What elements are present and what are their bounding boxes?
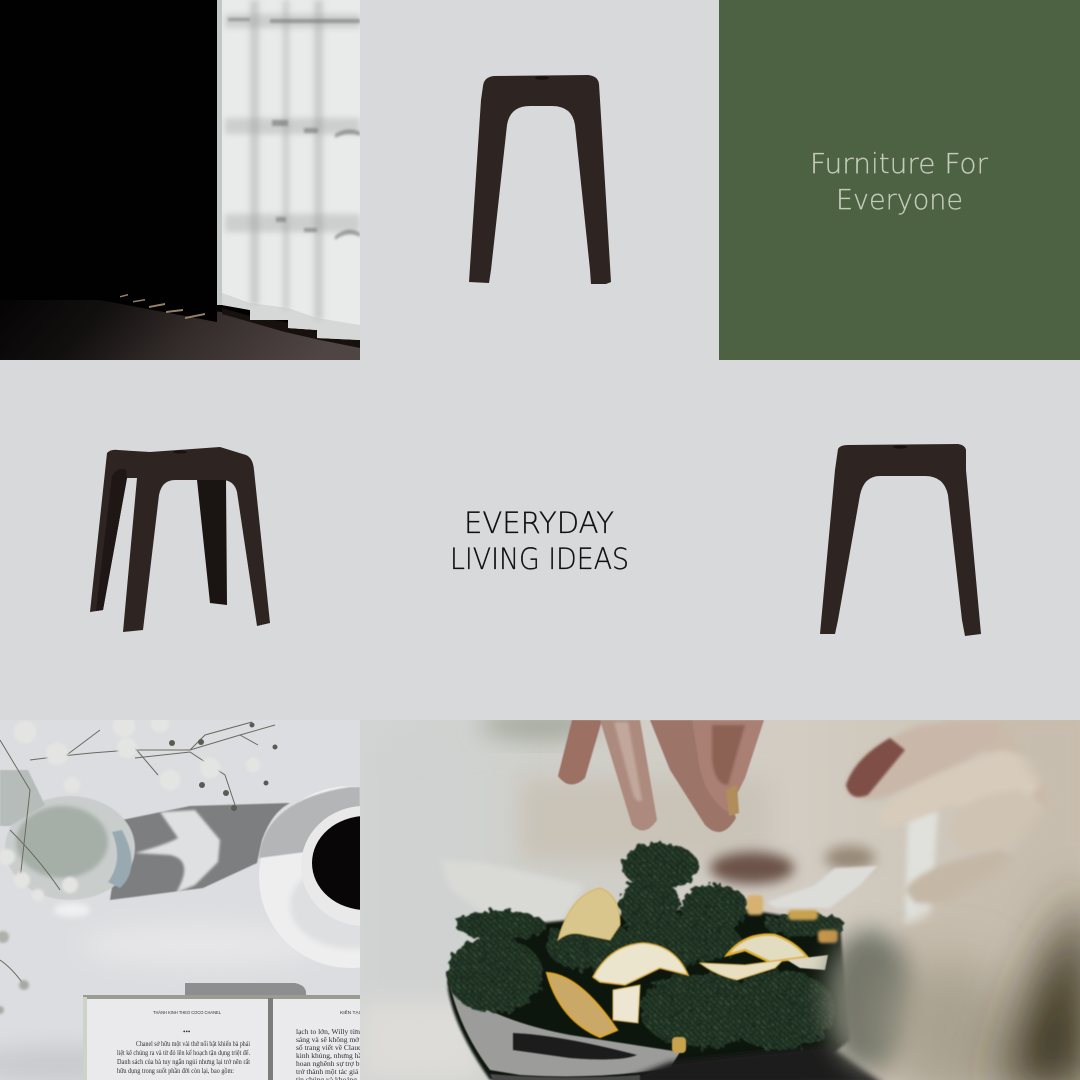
lemon slices [547,888,838,1053]
heading: Furniture For Everyone: Everyone [836,183,963,216]
product: stool angled view, left [90,447,270,632]
back right leg [197,480,227,605]
blurred foreground foliage [825,930,915,1070]
dark foreground blur [1000,890,1080,1080]
coffee [312,816,360,910]
book text: ••• [183,1028,191,1036]
photo: dark curtain and sheer window [0,0,360,360]
book text: số trang viết về Claudine trong [296,1043,389,1052]
window edge line [217,0,222,305]
sheer curtain [222,0,360,340]
left hand fingers [558,720,764,832]
book text: KIẾN TẠO [340,1009,363,1016]
curtain hem [222,293,360,340]
book text: Chanel sở hữu một vài thứ nổi bật khiến bà phải [136,1039,250,1048]
panel: green title block [719,0,1080,360]
book text: THÀNH KINH THEO COCO CHANEL [153,1009,221,1016]
book text: sáng và sẽ không mở của [296,1035,372,1044]
book text: lạch to lớn, Willy từng nhớ [296,1027,378,1036]
book text: hữu dụng trong suốt phần đời còn lại, bao gồm: [117,1066,234,1075]
saucer [259,786,360,968]
dark gap under sheer [222,308,360,348]
open book [83,983,389,1080]
flower stems [0,722,275,985]
light slits [120,294,205,319]
black curtain [102,300,217,322]
book text: kinh khủng, nhưng hầu hết c [296,1051,382,1060]
flowers [0,748,221,1015]
flower buds [169,722,278,811]
book text: liệt kê chúng ra và từ đó lên kế hoạch tận dụng triệt để. [117,1048,250,1057]
photo: table with flowers, coffee and book [0,720,360,1080]
iron skillet [448,905,885,1080]
heading: Furniture For Everyone: Furniture For [810,147,988,180]
photo: hands preparing a salad [360,711,1080,1080]
right hand [844,720,1052,1076]
light caustic [135,810,220,893]
product: stool front view, top [469,75,611,284]
heading: Everyday Living Ideas: EVERYDAY [464,506,614,540]
blurred white utensil [767,866,878,908]
book text [117,1010,360,1080]
book text: Danh sách của bà tuy ngắn ngủi nhưng lại trở nên rất [117,1057,251,1066]
book text: trở thành một tác giả thừ [296,1067,371,1076]
blurred white knife [445,863,582,922]
broccoli greens [447,843,845,1050]
glass vase [0,770,135,917]
product: stool front view, right [820,444,981,636]
carpet floor [0,300,360,360]
book text: hoan nghênh sự trợ bước đ [296,1059,377,1068]
shadow on table [110,803,290,900]
heading: Everyday Living Ideas: LIVING IDEAS [450,542,629,576]
coffee cup [302,806,360,926]
